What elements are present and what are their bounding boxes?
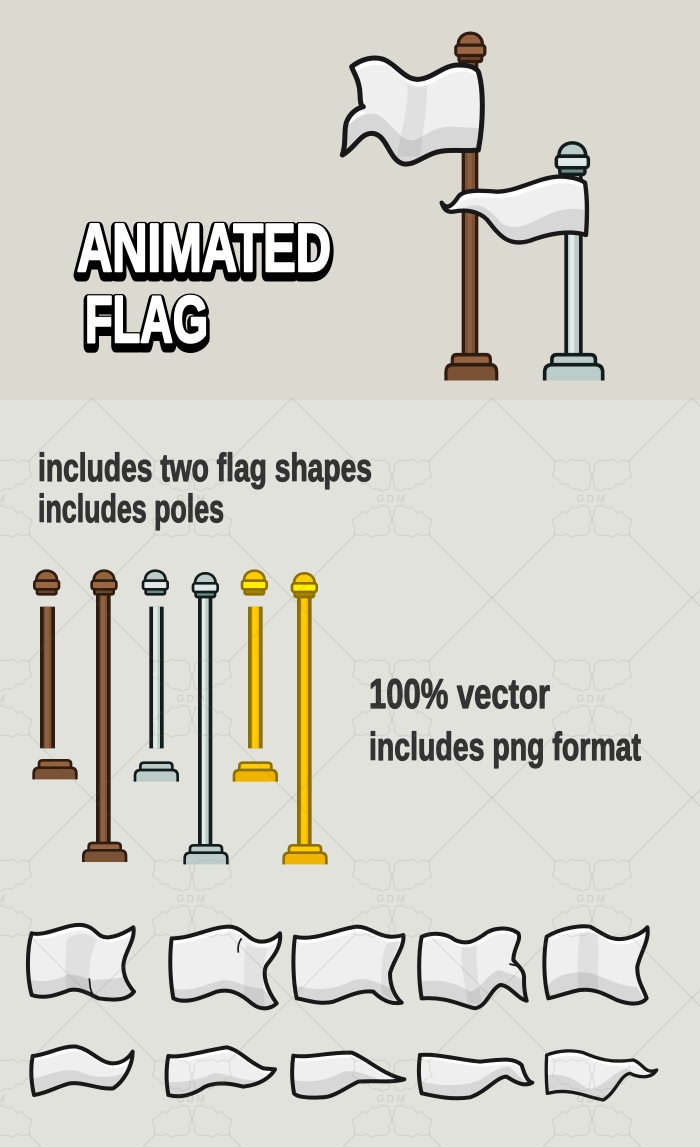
title: Animated Flag: ANIMATED	[77, 214, 331, 290]
flag animation frames, left part	[27, 925, 282, 1103]
silver pole	[545, 143, 603, 381]
hero illustration: two flags on poles	[340, 33, 603, 381]
frame: pennant 1	[30, 1046, 134, 1100]
text: vector and png format	[369, 670, 641, 769]
text: includes two flag shapes, includes poles	[38, 447, 372, 531]
silver assembled pole	[185, 573, 227, 864]
frame: pennant 2	[167, 1047, 277, 1103]
frame: square flag 1	[27, 925, 137, 1005]
brown pole	[446, 33, 497, 381]
lower background panel	[0, 400, 700, 1147]
large waving flag	[340, 58, 484, 171]
gold separated pole	[234, 571, 277, 782]
text: includes two flag shapes, includes poles: includes two flag shapes	[38, 447, 372, 490]
frame: square flag 5	[543, 926, 649, 1009]
silver separated pole	[135, 571, 178, 782]
title: Animated Flag	[77, 210, 331, 360]
watermark pattern: GDM	[577, 894, 607, 905]
watermark pattern: GDM	[577, 494, 607, 505]
frame: pennant 3	[290, 1053, 406, 1103]
frame: square flag 3	[293, 927, 405, 1008]
title: Animated Flag: ANIMATED	[77, 210, 331, 286]
text: includes two flag shapes, includes poles: includes poles	[38, 488, 224, 531]
brown assembled pole	[83, 571, 126, 862]
frame: square flag 4	[419, 929, 528, 1014]
watermark pattern: GDM	[177, 694, 207, 705]
watermark pattern	[0, 398, 700, 1147]
watermark pattern: GDM	[377, 694, 407, 705]
watermark pattern: GDM	[577, 1094, 607, 1105]
frame: square flag 2	[167, 927, 282, 1014]
pole parts set	[34, 571, 326, 864]
text: vector and png format: 100% vector	[369, 670, 550, 717]
watermark pattern: GDM	[377, 1094, 407, 1105]
flag animation frames, right part	[290, 926, 658, 1105]
title: Animated Flag: FLAG	[85, 282, 208, 356]
watermark pattern: GDM	[577, 694, 607, 705]
frame: pennant 5	[543, 1051, 658, 1105]
top banner panel	[0, 0, 700, 400]
long pennant flag	[442, 177, 589, 249]
title: Animated Flag: FLAG	[85, 286, 208, 360]
watermark pattern: GDM	[377, 894, 407, 905]
watermark pattern: GDM	[377, 494, 407, 505]
watermark pattern: GDM	[177, 894, 207, 905]
watermark pattern: GDM	[177, 1094, 207, 1105]
brown separated pole	[34, 571, 76, 779]
frame: pennant 4	[419, 1055, 534, 1103]
gold assembled pole	[284, 573, 326, 864]
watermark pattern: GDM	[177, 494, 207, 505]
